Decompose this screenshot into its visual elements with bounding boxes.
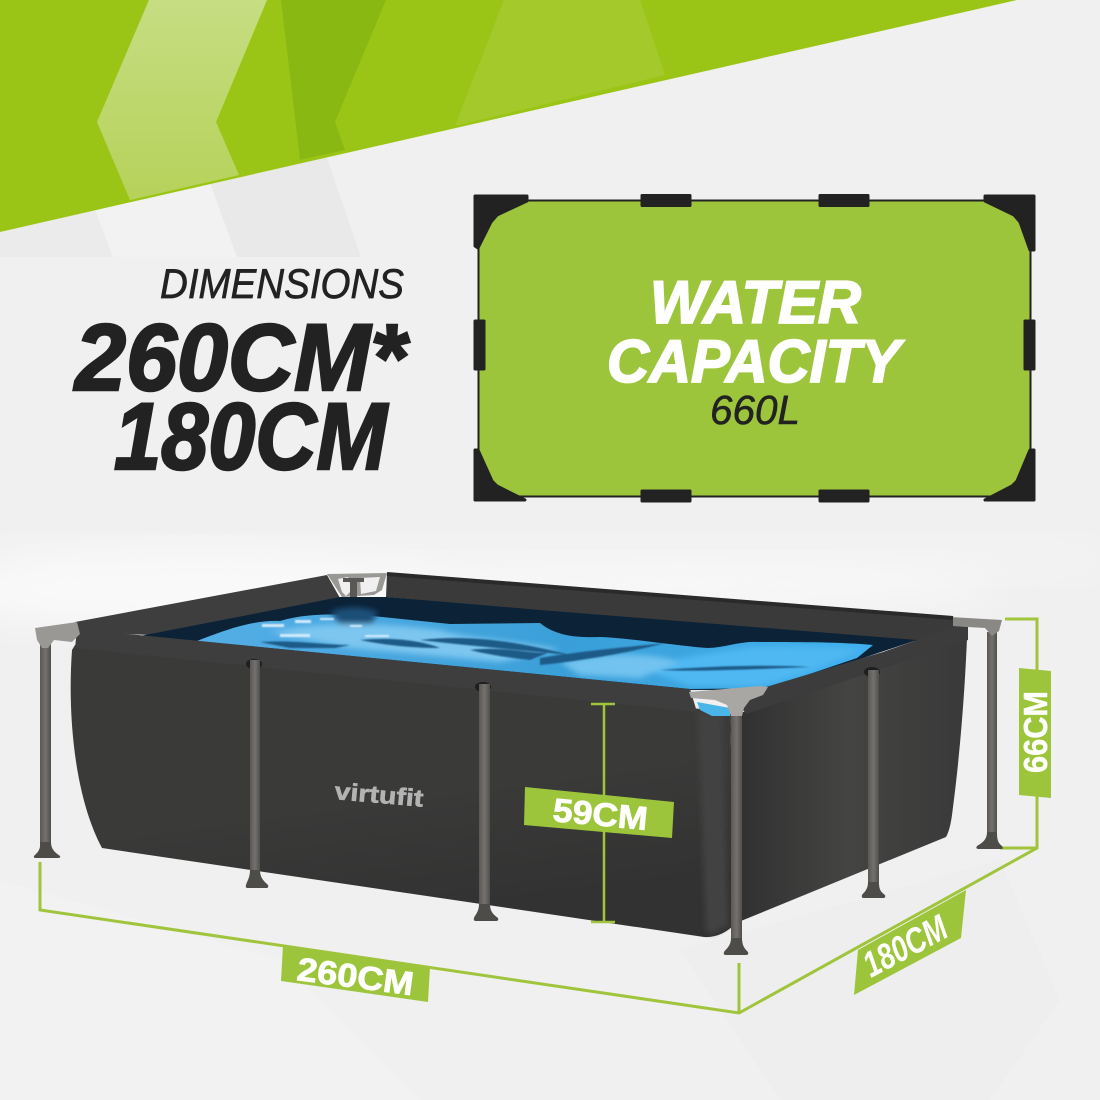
leg front 2: [246, 659, 268, 888]
front corner bracket: [689, 686, 768, 716]
label: 66cm: [1017, 668, 1054, 798]
back left rim: [75, 575, 340, 635]
brand logo: virtufit: [333, 778, 424, 813]
front liner: [71, 645, 736, 937]
far right leg: [976, 632, 1003, 849]
label: 260cm: 260CM: [295, 950, 416, 1002]
label: 66cm: 66CM: [1017, 691, 1054, 773]
dimension lines: [40, 619, 1037, 1013]
right liner: [730, 638, 967, 923]
heading: dimensions: DIMENSIONS: [160, 260, 404, 307]
label: 180cm: 180CM: [856, 906, 955, 985]
water: [140, 597, 917, 690]
leg left: [34, 640, 60, 858]
panel corner brackets and tabs: [475, 196, 1034, 501]
far corner connectors: [950, 617, 1002, 636]
heading: dimensions: [73, 260, 410, 490]
back corner bracket: [327, 573, 387, 597]
panel title: WATER: [650, 269, 861, 336]
label: 260cm: [281, 945, 430, 1002]
liner corner fold: [698, 712, 728, 934]
panel title: CAPACITY: [607, 328, 905, 395]
right rim: [735, 626, 968, 714]
panel: water capacity: [475, 196, 1034, 501]
leg front corner: [724, 715, 748, 955]
left corner bracket: [35, 622, 80, 648]
green diagonal banner: [0, 0, 1017, 232]
label: 59cm: [524, 703, 674, 923]
front rim: [75, 629, 697, 712]
pool: [34, 573, 1003, 955]
back rim: [386, 573, 953, 641]
back rim top edge: [387, 574, 953, 618]
value: 260CM*: 260CM*: [73, 305, 410, 411]
leg right middle: [862, 667, 885, 898]
panel value: 660L: [710, 387, 800, 433]
panel title: [607, 269, 905, 395]
value: 180CM: 180CM: [114, 384, 389, 490]
label: 59cm: 59CM: [551, 791, 649, 837]
leg front 3: [474, 682, 498, 921]
water highlights: [270, 608, 862, 686]
